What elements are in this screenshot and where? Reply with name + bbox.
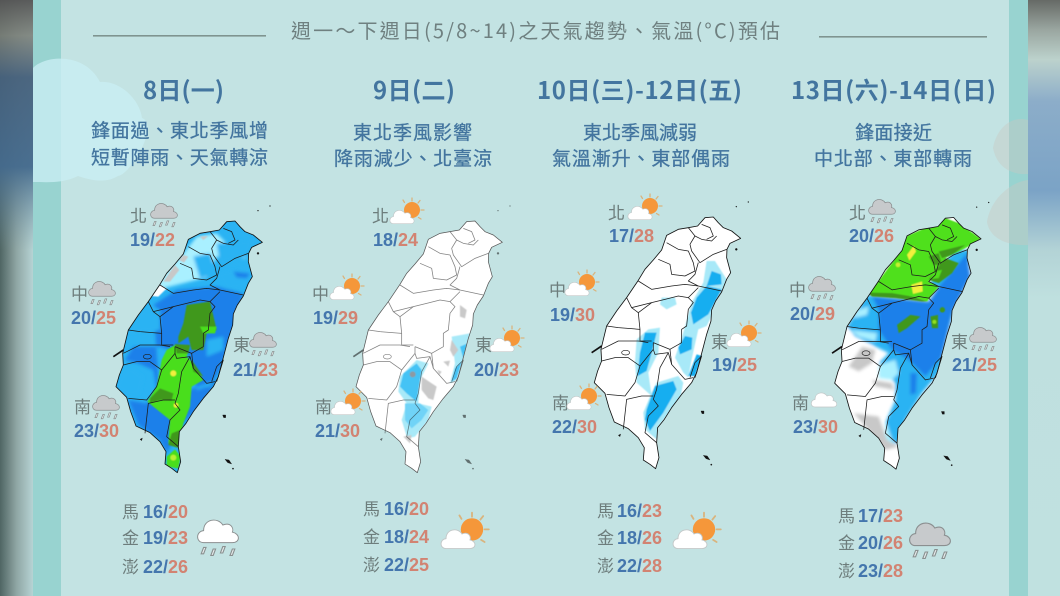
offshore islands forecast: 18/24 bbox=[384, 527, 429, 547]
offshore islands forecast: 澎 bbox=[838, 557, 855, 582]
central forecast bbox=[71, 280, 116, 328]
south forecast bbox=[315, 389, 365, 441]
icon: sun and cloud bbox=[441, 513, 489, 549]
east forecast: 東 bbox=[951, 328, 968, 353]
south forecast bbox=[552, 384, 601, 437]
central forecast: 中 bbox=[789, 276, 806, 301]
south forecast: 23/30 bbox=[793, 417, 838, 437]
north forecast: 北 bbox=[608, 199, 625, 224]
south forecast: 南 bbox=[315, 393, 332, 418]
north forecast: 北 bbox=[130, 202, 147, 227]
north forecast: 20/26 bbox=[849, 226, 894, 246]
central forecast: 19/29 bbox=[313, 308, 358, 328]
offshore islands forecast bbox=[597, 497, 662, 577]
offshore islands forecast: 16/20 bbox=[143, 502, 188, 522]
east forecast bbox=[233, 331, 278, 380]
description bbox=[552, 118, 730, 171]
offshore islands forecast bbox=[122, 498, 188, 578]
south forecast: 21/30 bbox=[315, 421, 360, 441]
rain map bbox=[592, 201, 749, 469]
offshore islands forecast: 金 bbox=[122, 524, 139, 549]
east forecast: 19/25 bbox=[712, 355, 757, 375]
icon: white rain cloud bbox=[198, 520, 238, 555]
south forecast: 23/30 bbox=[74, 421, 119, 441]
east forecast bbox=[951, 328, 997, 375]
north forecast: 17/28 bbox=[609, 226, 654, 246]
east forecast bbox=[474, 326, 524, 380]
left teal band bbox=[33, 0, 61, 596]
offshore islands forecast: 金 bbox=[838, 529, 855, 554]
day title: 9日(二) bbox=[373, 71, 455, 106]
icon: sun and cloud bbox=[673, 513, 721, 549]
east forecast: 東 bbox=[475, 331, 492, 356]
central forecast: 中 bbox=[549, 276, 566, 301]
offshore islands forecast bbox=[363, 495, 429, 576]
title text: 週一～下週日(5/8~14)之天氣趨勢、氣溫(°C)預估 bbox=[291, 15, 780, 44]
decorative clouds right bbox=[987, 119, 1028, 245]
south forecast bbox=[792, 389, 838, 437]
description bbox=[91, 116, 268, 170]
day title: 8日(一) bbox=[143, 71, 224, 106]
header line left bbox=[93, 35, 266, 37]
offshore islands forecast: 16/23 bbox=[617, 501, 662, 521]
description: 東北季風減弱 bbox=[583, 118, 697, 145]
offshore islands forecast: 16/20 bbox=[384, 499, 429, 519]
south forecast: 南 bbox=[552, 389, 569, 414]
central forecast: 20/29 bbox=[790, 304, 835, 324]
rain map bbox=[353, 205, 510, 473]
description: 氣溫漸升、東部偶雨 bbox=[552, 144, 730, 171]
offshore islands forecast: 22/26 bbox=[143, 557, 188, 577]
description: 東北季風影響 bbox=[353, 118, 472, 145]
central forecast: 中 bbox=[312, 280, 329, 305]
offshore islands forecast: 金 bbox=[597, 524, 614, 549]
north forecast: 18/24 bbox=[373, 230, 418, 250]
offshore islands forecast: 澎 bbox=[597, 552, 614, 577]
description bbox=[334, 118, 492, 171]
day title: 13日(六)-14日(日) bbox=[791, 71, 996, 106]
description: 鋒面接近 bbox=[855, 118, 932, 145]
offshore islands forecast: 馬 bbox=[363, 495, 380, 520]
east forecast: 21/23 bbox=[233, 360, 278, 380]
right blurred edge strip bbox=[1028, 0, 1060, 596]
offshore islands forecast: 馬 bbox=[122, 498, 139, 523]
central forecast bbox=[789, 276, 835, 324]
offshore islands forecast: 17/23 bbox=[858, 506, 903, 526]
description: 短暫陣雨、天氣轉涼 bbox=[91, 143, 268, 170]
panel: 10-12日 bbox=[537, 71, 761, 577]
south forecast bbox=[74, 393, 119, 441]
offshore islands forecast: 19/23 bbox=[143, 528, 188, 548]
offshore islands forecast: 22/28 bbox=[617, 556, 662, 576]
rain map bbox=[113, 205, 270, 473]
day title: 10日(三)-12日(五) bbox=[537, 71, 742, 106]
north forecast bbox=[849, 199, 895, 246]
north forecast: 19/22 bbox=[130, 230, 175, 250]
offshore islands forecast: 金 bbox=[363, 523, 380, 548]
right teal band bbox=[1009, 0, 1028, 596]
offshore islands forecast bbox=[838, 502, 903, 582]
east forecast: 21/25 bbox=[952, 355, 997, 375]
central forecast: 20/25 bbox=[71, 308, 116, 328]
icon: gray rain cloud bbox=[910, 523, 950, 558]
offshore islands forecast: 18/26 bbox=[617, 528, 662, 548]
offshore islands forecast: 23/28 bbox=[858, 561, 903, 581]
decorative cloud left bbox=[33, 59, 148, 182]
south forecast: 南 bbox=[792, 389, 809, 414]
offshore islands forecast: 馬 bbox=[838, 502, 855, 527]
offshore islands forecast: 22/25 bbox=[384, 555, 429, 575]
east forecast: 東 bbox=[233, 331, 250, 356]
east forecast: 東 bbox=[711, 328, 728, 353]
offshore islands forecast: 馬 bbox=[597, 497, 614, 522]
north forecast: 北 bbox=[372, 202, 389, 227]
panel: 13-14日 bbox=[789, 71, 997, 582]
north forecast bbox=[608, 194, 662, 246]
offshore islands forecast: 20/26 bbox=[858, 533, 903, 553]
south forecast: 南 bbox=[74, 393, 91, 418]
south forecast: 22/30 bbox=[552, 417, 597, 437]
panel: 9日 bbox=[312, 71, 524, 576]
central forecast bbox=[312, 274, 364, 328]
east forecast: 20/23 bbox=[474, 360, 519, 380]
north forecast: 北 bbox=[849, 199, 866, 224]
central forecast bbox=[549, 270, 599, 325]
description bbox=[814, 118, 972, 171]
north forecast bbox=[130, 202, 177, 250]
left blurred edge strip bbox=[0, 0, 33, 596]
north forecast bbox=[372, 198, 424, 250]
description: 中北部、東部轉雨 bbox=[814, 144, 972, 171]
offshore islands forecast: 澎 bbox=[363, 551, 380, 576]
panel: 8日 bbox=[71, 71, 278, 578]
central forecast: 19/30 bbox=[550, 305, 595, 325]
central forecast: 中 bbox=[71, 280, 88, 305]
offshore islands forecast: 澎 bbox=[122, 553, 139, 578]
rain map bbox=[832, 202, 989, 469]
header line right bbox=[819, 36, 987, 38]
east forecast bbox=[711, 321, 761, 375]
description: 鋒面過、東北季風增 bbox=[91, 116, 268, 143]
description: 降雨減少、北臺涼 bbox=[334, 144, 492, 171]
